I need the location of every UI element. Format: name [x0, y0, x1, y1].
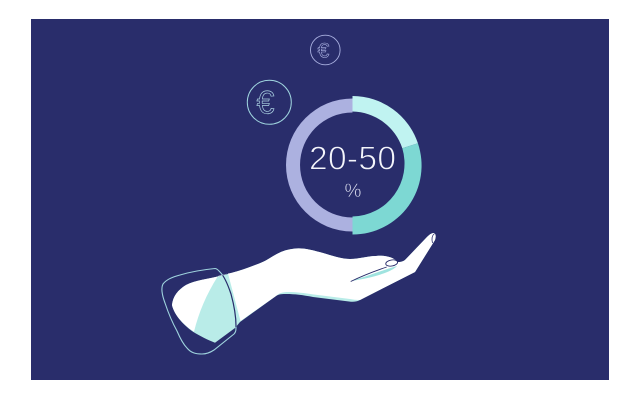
hand teal base: [172, 233, 436, 343]
value label: 20-50: [309, 140, 396, 178]
icon: small euro coin: €: [318, 40, 330, 62]
hand white body: [172, 233, 436, 332]
icon: small euro coin: [310, 35, 340, 65]
cuff outline over hand: [222, 275, 237, 328]
ring segment: light aqua: [352, 96, 418, 148]
thumb shadow: [351, 266, 397, 281]
fingernail: [432, 234, 434, 243]
cuff outline: [162, 268, 236, 354]
icon: large euro coin: €: [257, 84, 275, 120]
icon: large euro coin: [247, 80, 291, 124]
hand illustration: [162, 233, 436, 354]
donut chart: [286, 96, 422, 235]
thumb crease: [351, 267, 387, 282]
thumbnail: [385, 259, 398, 267]
percent sign: %: [345, 181, 362, 202]
ring segment: teal: [352, 143, 422, 235]
ring segment: lavender: [286, 98, 352, 232]
